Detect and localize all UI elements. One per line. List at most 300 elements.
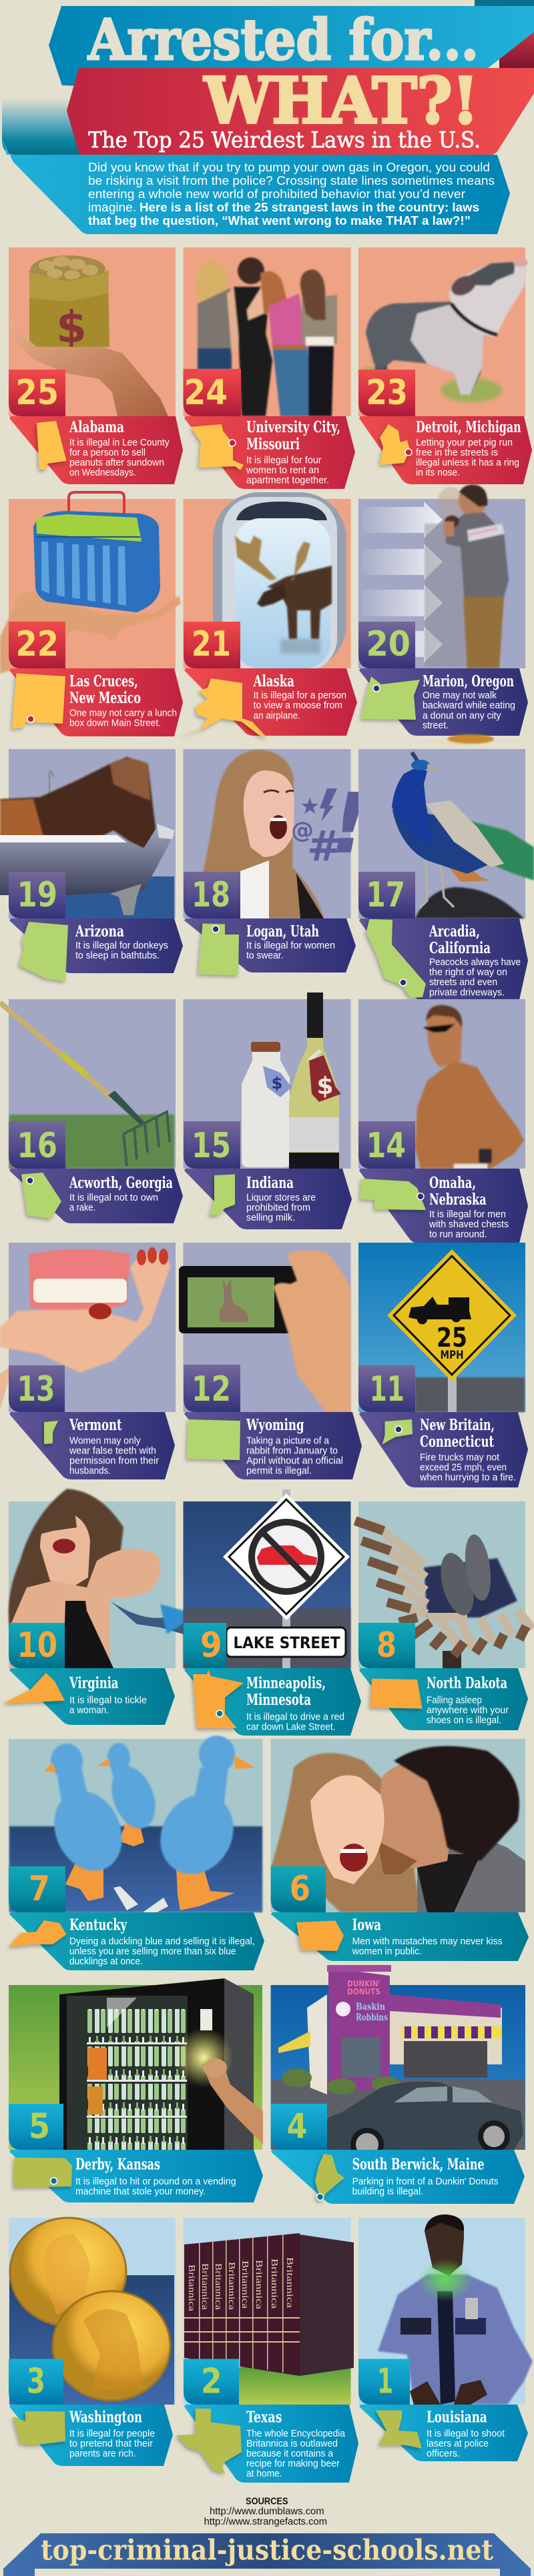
- state map: Louisiana: [376, 2411, 422, 2449]
- description: It is illegal not to own: [69, 1193, 158, 1203]
- heading: California: [429, 939, 491, 957]
- intro text: entering a whole new world of prohibited behavior that you’d never: [88, 187, 465, 201]
- description: Peacocks always have: [429, 957, 521, 968]
- state map: Wyoming: [187, 1419, 240, 1460]
- ribbon: [271, 1912, 529, 1961]
- panel: 21 Alaska: [179, 492, 357, 738]
- number badge: 18: [192, 875, 230, 915]
- ribbon: [184, 416, 355, 489]
- panel: 22 Las Cruces: [0, 492, 183, 736]
- panel: 10 Virginia: [3, 1489, 197, 1725]
- heading: Vermont: [69, 1416, 122, 1434]
- description: [75, 940, 168, 961]
- description: [427, 2429, 505, 2459]
- ribbon: [184, 1412, 362, 1479]
- heading: Las Cruces,: [69, 672, 138, 690]
- blue title ribbon: [49, 6, 534, 100]
- description: [69, 1436, 159, 1477]
- number badge: 20: [366, 624, 411, 664]
- panel background: [9, 2218, 176, 2405]
- red car: [257, 1545, 317, 1565]
- description: It is illegal to hit or pound on a vending: [75, 2176, 236, 2187]
- description: to pretend that their: [69, 2439, 153, 2449]
- panel background: [358, 749, 525, 918]
- illustration: encyclopedia books: Britannica: [213, 2263, 223, 2311]
- heading: University City,: [246, 418, 340, 436]
- panel background: [358, 247, 525, 416]
- description: to view a moose from: [254, 700, 342, 711]
- red ribbon back fold: [499, 21, 534, 68]
- state map: Georgia: [21, 1173, 61, 1219]
- number badge: [9, 1866, 65, 1912]
- state map: Virginia: [3, 1673, 65, 1704]
- intro ribbon: [2, 139, 510, 234]
- dark blue backdrop: [9, 2275, 174, 2405]
- description: Liquor stores are: [246, 1193, 316, 1203]
- description: rabbit from January to: [246, 1446, 338, 1457]
- description: to swear.: [246, 950, 283, 961]
- panel: 15 Indiana: [183, 993, 352, 1229]
- heading: Indiana: [246, 1174, 294, 1192]
- swear symbols: #: [307, 822, 342, 870]
- panel background: [358, 499, 525, 668]
- ribbon: [184, 2405, 358, 2483]
- state map: New Mexico: [12, 674, 65, 729]
- panel background: [9, 1501, 176, 1668]
- heading: Alabama: [69, 418, 124, 436]
- illustration: encyclopedia books: [184, 2233, 354, 2376]
- swear symbols: [291, 776, 368, 872]
- description: ducklings at once.: [69, 1956, 143, 1967]
- green backdrop: [238, 2367, 351, 2405]
- panel background: [358, 999, 525, 1169]
- ribbon: [9, 1412, 175, 1479]
- panel: 4 South Berwick: [271, 1965, 525, 2204]
- illustration: fire truck road sign: MPH: [441, 1349, 463, 1362]
- ribbon: [359, 668, 528, 736]
- number badge: 17: [366, 875, 405, 915]
- heading: New Britain,: [420, 1416, 495, 1434]
- panel background: [271, 1985, 525, 2150]
- number badge: 7: [29, 1869, 50, 1909]
- description: [246, 455, 329, 486]
- description: [429, 957, 521, 999]
- heading: Arcadia,: [429, 922, 480, 940]
- panel: 11 New Britain: [358, 1243, 528, 1487]
- illustration: dentures in a hand: [0, 1247, 170, 1409]
- illustration: encyclopedia books: Britannica: [186, 2265, 196, 2312]
- description: [246, 1193, 316, 1223]
- heading: [69, 672, 141, 707]
- number badge: 1: [377, 2361, 393, 2401]
- ribbon: [9, 918, 183, 973]
- illustration: two gold coins: [10, 2218, 170, 2401]
- description: One may not carry a lunch: [69, 708, 177, 719]
- illustration: milk and wine bottles: [242, 993, 341, 1169]
- description: unless you are selling more than six blue: [69, 1946, 236, 1957]
- illustration: donkey in bathtub: [0, 757, 175, 918]
- panel: 20 Marion: [358, 484, 528, 746]
- ribbon: [359, 1668, 528, 1730]
- description: It is illegal to tickle: [69, 1695, 147, 1706]
- description: a donut on any city: [423, 710, 501, 721]
- header banner: [2, 0, 534, 234]
- description: a rake.: [69, 1203, 95, 1213]
- illustration: encyclopedia books: Britannica: [269, 2259, 279, 2309]
- state map: Maine: [315, 2154, 344, 2200]
- description: [419, 1452, 516, 1483]
- description: wear false teeth with: [69, 1446, 156, 1457]
- panel: 8 North Dakota: [355, 1501, 533, 1730]
- state map: Iowa: [296, 1921, 344, 1951]
- description: car down Lake Street.: [246, 1722, 335, 1733]
- state map: Oregon: [361, 676, 420, 720]
- description: Letting your pet pig run: [416, 438, 513, 448]
- ribbon: [184, 1668, 361, 1736]
- state map: Indiana: [210, 1174, 235, 1215]
- state map: Alaska: [179, 678, 267, 738]
- state map: Michigan: [380, 424, 412, 465]
- number badge: 19: [17, 875, 57, 915]
- description: Parking in front of a Dunkin' Donuts: [352, 2176, 499, 2187]
- ribbon: [9, 1912, 264, 1970]
- description: shoes on is illegal.: [427, 1716, 501, 1726]
- description: women in public.: [352, 1946, 422, 1957]
- panel: 12 Wyoming: [179, 1243, 362, 1479]
- number badge: 8: [376, 1626, 396, 1666]
- number badge: 3: [27, 2361, 45, 2401]
- description: [246, 2429, 346, 2479]
- heading: Texas: [246, 2408, 282, 2427]
- subtitle: The Top 25 Weirdest Laws in the U.S.: [88, 127, 481, 153]
- description: April without an official: [246, 1456, 343, 1467]
- description: selling milk.: [246, 1213, 295, 1223]
- panel background: [183, 2218, 351, 2405]
- footer site name: top-criminal-justice-schools.net: [41, 2533, 494, 2567]
- state map: Alabama: [37, 421, 67, 470]
- heading: Virginia: [69, 1674, 119, 1692]
- description: building is illegal.: [352, 2186, 423, 2197]
- number badge: [184, 2359, 239, 2405]
- illustration: rake on grass: [0, 1003, 174, 1169]
- panel: 3 Washington: [9, 2218, 176, 2466]
- ribbon: [359, 918, 528, 1000]
- description: private driveways.: [429, 988, 505, 999]
- illustration: arrows and man walking backward with donut: [361, 484, 509, 668]
- description: [352, 1936, 503, 1957]
- heading: New Mexico: [69, 689, 141, 707]
- panel: 1 Louisiana: [358, 2214, 533, 2461]
- description: It is illegal for four: [246, 455, 322, 466]
- number badge: 14: [366, 1126, 406, 1166]
- panel: 9 Minneapolis: [183, 1489, 361, 1736]
- intro text: that beg the question, “What went wrong to make THAT a law?!”: [88, 213, 471, 227]
- ribbon: [184, 918, 356, 973]
- number badge: 16: [17, 1126, 57, 1166]
- heading: Arizona: [75, 922, 124, 940]
- left roll: [2, 98, 80, 155]
- panel background: [183, 247, 351, 416]
- ribbon: [9, 668, 183, 736]
- description: prohibited from: [246, 1203, 310, 1213]
- ribbon: [9, 2150, 263, 2202]
- heading: Logan, Utah: [246, 922, 319, 940]
- description: It is illegal for men: [429, 1209, 506, 1220]
- swear symbols: ★: [300, 793, 320, 820]
- description: [416, 438, 519, 478]
- description: in its nose.: [416, 468, 460, 478]
- ribbon: [359, 1169, 528, 1243]
- description: Taking a picture of a: [246, 1436, 330, 1447]
- description: because it contains a: [246, 2449, 334, 2459]
- description: [352, 2176, 499, 2197]
- illustration: lunch box on a hand: [0, 492, 181, 674]
- illustration: milk and wine bottles: $: [272, 1074, 282, 1093]
- number badge: 4: [287, 2107, 308, 2147]
- description: parents are rich.: [69, 2449, 136, 2459]
- description: apartment together.: [246, 475, 329, 486]
- panel background: [271, 1739, 525, 1912]
- description: illegal unless it has a ring: [416, 458, 519, 468]
- illustration: fire truck road sign: [387, 1249, 525, 1412]
- description: Women may only: [69, 1436, 141, 1447]
- description: [427, 1695, 509, 1726]
- state map: Kentucky: [9, 1920, 67, 1947]
- number badge: [358, 2359, 410, 2405]
- panel: 2 Texas: [176, 2218, 358, 2483]
- intro text: Here is a list of the 25 strangest laws in the country: laws: [140, 200, 479, 214]
- description: [69, 1936, 255, 1967]
- state map: Washington: [13, 2411, 65, 2445]
- number badge: [9, 2359, 63, 2405]
- description: Fire trucks may not: [420, 1452, 499, 1463]
- heading: [246, 1674, 326, 1709]
- intro text: Did you know that if you try to pump your own gas in Oregon, you could: [88, 160, 490, 174]
- panel background: [358, 2218, 525, 2405]
- description: exceed 25 mph, even: [420, 1462, 507, 1473]
- description: [69, 2429, 155, 2459]
- state map: Texas: [176, 2409, 242, 2474]
- illustration: no red car sign with street name: LAKE STREET: [234, 1634, 340, 1652]
- heading: Alaska: [253, 672, 294, 690]
- heading: Washington: [69, 2408, 142, 2427]
- description: the right of way on: [429, 967, 507, 978]
- number badge: 2: [201, 2361, 222, 2401]
- sources: http://www.strangefacts.com: [204, 2517, 327, 2527]
- description: anywhere with your: [427, 1705, 509, 1716]
- panel: 17 Arcadia: [358, 749, 534, 1000]
- heading: Minneapolis,: [246, 1674, 326, 1692]
- description: It is illegal in Lee County: [69, 438, 170, 448]
- number badge: 6: [290, 1869, 310, 1909]
- heading: [420, 1416, 495, 1451]
- heading: Iowa: [352, 1916, 381, 1934]
- description: [69, 708, 177, 728]
- description: with shaved chests: [429, 1219, 509, 1230]
- panel: 13 Vermont: [0, 1243, 176, 1479]
- panel: 14 Omaha: [358, 999, 528, 1243]
- panel: 7 Kentucky: [9, 1736, 264, 1970]
- description: [69, 1695, 147, 1716]
- intro text: [88, 160, 495, 227]
- illustration: bag of peanuts on a hand: $: [56, 301, 87, 353]
- description: an airplane.: [254, 710, 300, 721]
- illustration: encyclopedia books: Britannica: [226, 2262, 236, 2311]
- description: Dyeing a duckling blue and selling it is illegal,: [69, 1936, 255, 1947]
- sources: SOURCES: [246, 2496, 288, 2507]
- state map: Connecticut: [382, 1419, 413, 1445]
- red title ribbon: [67, 68, 534, 155]
- sources: http://www.dumblaws.com: [210, 2507, 324, 2517]
- illustration: man's feet on a park bench: [355, 1521, 533, 1668]
- illustration: encyclopedia books: Britannica: [240, 2261, 250, 2309]
- illustration: Dunkin' Donuts store and car: [271, 1965, 525, 2161]
- illustration: Dunkin' Donuts store and car: DONUTS: [347, 1987, 380, 1996]
- panel background: [183, 499, 351, 668]
- illustration: three blue ducklings: [41, 1736, 256, 1912]
- intro text: imagine.: [88, 200, 136, 214]
- illustration: Dunkin' Donuts store and car: DUNKIN': [347, 1979, 380, 1988]
- panel background: [183, 1501, 351, 1668]
- number badge: [9, 2104, 63, 2150]
- description: officers.: [427, 2449, 460, 2459]
- panel: 5 Derby: [9, 1978, 263, 2202]
- number badge: 15: [192, 1126, 231, 1166]
- description: on Wednesdays.: [69, 468, 136, 478]
- description: at home.: [246, 2469, 282, 2479]
- description: One may not walk: [423, 690, 497, 701]
- number badge: [184, 1623, 226, 1668]
- illustration: bag of peanuts on a hand: [9, 255, 168, 416]
- heading: [429, 1174, 487, 1209]
- panel: 24 University City: [183, 247, 355, 489]
- number badge: 9: [200, 1626, 222, 1666]
- description: to run around.: [429, 1229, 487, 1240]
- illustration: moose through airplane window: [213, 492, 346, 672]
- panel background: [9, 1739, 263, 1912]
- ribbon: [9, 1668, 175, 1725]
- footer ribbon: [3, 2533, 531, 2576]
- illustration: hand with camera photographing rabbit: [179, 1250, 350, 1412]
- illustration: encyclopedia books: Britannica: [200, 2263, 210, 2311]
- swear symbols: !: [330, 776, 368, 872]
- state map: Utah: [198, 923, 239, 975]
- description: machine that stole your money.: [75, 2186, 206, 2197]
- number badge: [358, 1623, 415, 1668]
- number badge: [271, 2104, 327, 2150]
- ribbon: [271, 2150, 525, 2204]
- description: It is illegal for a person: [254, 690, 346, 701]
- state map: Arizona: [19, 922, 68, 981]
- number badge: [271, 1866, 326, 1912]
- description: It is illegal to shoot: [427, 2429, 505, 2439]
- description: husbands.: [69, 1466, 111, 1477]
- description: It is illegal for people: [69, 2429, 155, 2439]
- number badge: 22: [16, 624, 59, 664]
- heading: [246, 418, 340, 454]
- ribbon: [9, 1169, 183, 1223]
- description: a woman.: [69, 1705, 109, 1716]
- number badge: 11: [370, 1369, 405, 1409]
- illustration: four women: [196, 257, 337, 416]
- description: [246, 940, 335, 961]
- ribbon: [359, 1412, 528, 1487]
- description: It is illegal for women: [246, 940, 335, 951]
- heading: Kentucky: [69, 1916, 127, 1934]
- description: [246, 1712, 344, 1733]
- state map: Missouri: [191, 424, 244, 470]
- illustration: shirtless man with sunglasses: [415, 1005, 524, 1169]
- description: [69, 1193, 158, 1213]
- footer banner: [3, 2533, 531, 2576]
- state map: Nebraska: [360, 1179, 426, 1210]
- description: It is illegal for donkeys: [75, 940, 168, 951]
- illustration: encyclopedia books: Britannica: [284, 2257, 294, 2309]
- heading: [429, 922, 491, 957]
- ribbon: [184, 668, 357, 736]
- description: It is illegal to drive a red: [246, 1712, 344, 1723]
- description: permission from their: [69, 1456, 159, 1467]
- description: street.: [423, 720, 449, 731]
- description: for a person to sell: [69, 448, 146, 458]
- number badge: 13: [17, 1369, 55, 1409]
- illustration: pig: [359, 259, 528, 402]
- description: Falling asleep: [427, 1695, 482, 1706]
- sources: [204, 2496, 327, 2527]
- description: peanuts after sundown: [69, 458, 164, 468]
- heading: Derby, Kansas: [75, 2156, 160, 2174]
- description: free in the streets is: [416, 448, 498, 458]
- illustration: woman swearing: [192, 750, 368, 918]
- number badge: 24: [184, 373, 228, 413]
- panel background: [9, 999, 176, 1169]
- illustration: peacock: [392, 752, 534, 918]
- heading: Missouri: [246, 436, 300, 454]
- illustration: laughing woman and feather: [9, 1489, 197, 1668]
- panel background: [358, 1501, 525, 1668]
- intro text: be risking a visit from the police? Crossing state lines sometimes means: [88, 173, 495, 187]
- description: women to rent an: [246, 466, 319, 476]
- description: recipe for making beer: [246, 2459, 340, 2469]
- description: backward while eating: [423, 700, 515, 711]
- description: streets and even: [429, 977, 497, 988]
- panel background: [183, 1243, 351, 1412]
- description: Britannica is outlawed: [246, 2439, 338, 2449]
- panel: 23 Detroit: [358, 247, 532, 484]
- description: [254, 690, 346, 721]
- description: box down Main Street.: [69, 718, 161, 728]
- description: permit is illegal.: [246, 1466, 312, 1477]
- heading: Omaha,: [429, 1174, 476, 1192]
- illustration: encyclopedia books: Britannica: [254, 2260, 264, 2310]
- panel: 18 Logan: [183, 749, 368, 975]
- ribbon fold top right: [475, 0, 534, 7]
- panel background: [9, 749, 176, 918]
- illustration: milk and wine bottles: $: [316, 1073, 334, 1100]
- illustration: fire truck road sign: 25: [437, 1323, 467, 1353]
- illustration: police officer with green laser: [378, 2214, 533, 2405]
- panel: 19 Arizona: [0, 749, 183, 981]
- heading: Nebraska: [429, 1191, 487, 1209]
- number badge: 12: [192, 1369, 231, 1409]
- panel background: [9, 247, 176, 416]
- panel: 6 Iowa: [271, 1739, 529, 1961]
- description: Men with mustaches may never kiss: [352, 1936, 503, 1947]
- description: [69, 438, 170, 478]
- state map: Kansas: [13, 2158, 72, 2188]
- heading: Wyoming: [246, 1416, 304, 1434]
- fire truck silhouette: [409, 1297, 471, 1325]
